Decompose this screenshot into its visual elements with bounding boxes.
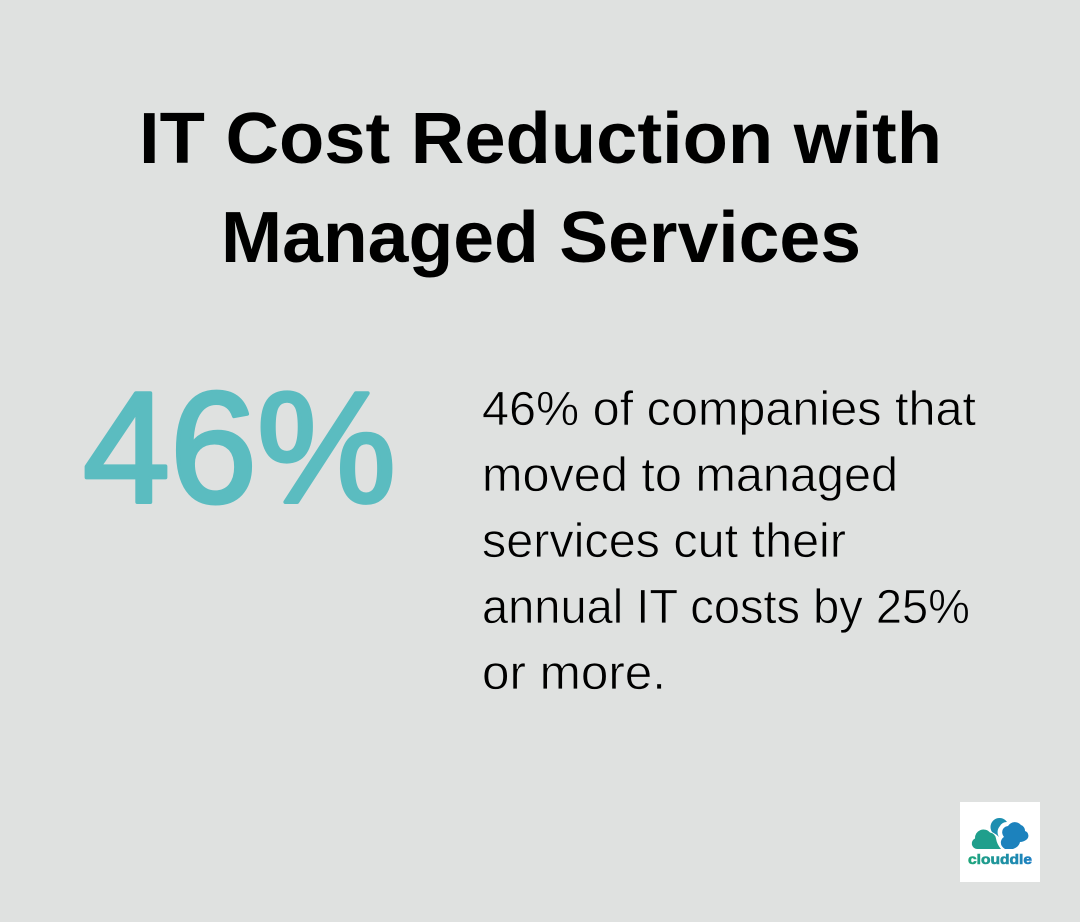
description text: 46% of companies that bbox=[482, 383, 976, 436]
description text: annual IT costs by 25% bbox=[482, 581, 970, 634]
description text bbox=[482, 383, 976, 700]
description text: moved to managed bbox=[482, 449, 898, 502]
description text: or more. bbox=[482, 647, 666, 700]
icon: middle cloud arc bbox=[990, 818, 1007, 837]
icon: right cloud bbox=[1001, 822, 1028, 849]
title: Managed Services bbox=[221, 198, 861, 278]
logo wordmark: clouddle bbox=[968, 851, 1032, 867]
icon: left cloud bbox=[972, 829, 1001, 849]
logo: clouddle bbox=[960, 802, 1040, 882]
description text: services cut their bbox=[482, 515, 846, 568]
big statistic: 46%: 46% bbox=[83, 360, 396, 536]
title bbox=[139, 99, 942, 278]
logo background bbox=[960, 802, 1040, 882]
title: IT Cost Reduction with bbox=[139, 99, 942, 179]
